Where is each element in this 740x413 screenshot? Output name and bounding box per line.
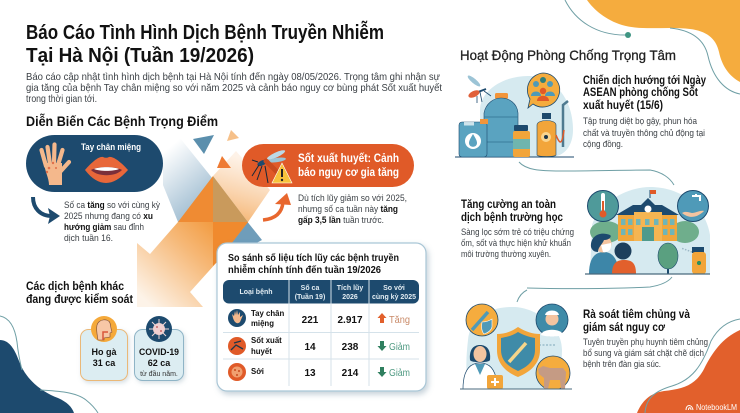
- panel: hand foot mouth pill: Tay chân miệng: [81, 142, 141, 152]
- text: school safety: môi trường thường xuyên.: [461, 249, 551, 260]
- text: hand foot mouth description: dịch tuần 16.: [64, 233, 113, 244]
- central decorative arrows: [137, 130, 270, 307]
- intro paragraph: trong thời gian tới.: [26, 93, 97, 105]
- text: hand foot mouth description: [64, 200, 160, 244]
- arrow: decreasing trend: [33, 197, 60, 224]
- text: vaccination review: bệnh trên đàn gia súc.: [583, 359, 661, 370]
- row: hand foot mouth: [228, 309, 410, 328]
- table header: cùng kỳ 2025: [372, 294, 416, 301]
- heading: other diseases: Các dịch bệnh khác: [26, 279, 124, 293]
- text: dengue description: gấp 3,5 lần tuần trước.: [298, 215, 384, 226]
- card: covid-19: COVID-19: [139, 347, 179, 357]
- table header: [223, 280, 419, 304]
- school building: [616, 190, 679, 241]
- row: hand foot mouth: 221: [302, 315, 319, 326]
- title: Báo Cáo Tình Hình Dịch Bệnh Truyền Nhiễm: [26, 20, 384, 44]
- table title: [228, 252, 399, 276]
- text: school safety: ốm, sốt và thực hiện khử khuẩn: [461, 238, 571, 249]
- text: hand foot mouth description: hướng giảm sau đỉnh: [64, 222, 144, 233]
- text: ASEAN dengue campaign: xuất huyết (15/6): [583, 100, 663, 112]
- mosquito: [466, 74, 491, 103]
- row: measles: Giảm: [389, 367, 410, 379]
- row: dengue: 14: [304, 342, 316, 353]
- intro paragraph: [26, 71, 442, 105]
- row: measles: Sởi: [251, 367, 264, 376]
- row: dengue: Giảm: [389, 341, 410, 353]
- row: measles: 13: [304, 368, 316, 379]
- text: vaccination review: Tuyên truyền phụ huynh tiêm chủng: [583, 337, 708, 348]
- row: hand foot mouth: 2.917: [337, 315, 363, 326]
- text: vaccination review: Rà soát tiêm chủng và: [583, 309, 691, 321]
- card: covid-19: từ đầu năm.: [140, 369, 178, 378]
- text: hand foot mouth description: Số ca tăng so với cùng kỳ: [64, 200, 160, 211]
- row: dengue: [228, 336, 410, 356]
- disinfectant sprayer: [681, 247, 706, 274]
- text: school safety: Sàng lọc sớm trẻ có triệu chứng: [461, 227, 574, 238]
- intro paragraph: Báo cáo cập nhật tình hình dịch bệnh tại Hà Nội tính đến ngày 08/05/2026. Trọng tâm ghi nhận sự: [26, 71, 440, 83]
- text: dengue description: [298, 193, 407, 226]
- row: hand foot mouth: Tay chân: [251, 309, 284, 318]
- heading: other diseases: đang được kiểm soát: [26, 292, 133, 306]
- vaccine circle: [466, 304, 498, 336]
- row: dengue: huyết: [251, 347, 272, 356]
- text: vaccination review: [583, 309, 708, 370]
- row: measles: 214: [342, 368, 359, 379]
- man with mask: [589, 234, 619, 274]
- table title: So sánh số liệu tích lũy các bệnh truyền: [228, 252, 399, 264]
- heading: key diseases: Diễn Biến Các Bệnh Trọng Điểm: [26, 113, 218, 129]
- text: school safety: dịch bệnh trường học: [461, 212, 564, 224]
- table header: Loại bệnh: [239, 289, 273, 296]
- thermometer circle: [588, 190, 618, 222]
- illustration: mosquito control: [455, 73, 574, 157]
- row: dengue: Sốt xuất: [251, 336, 282, 345]
- text: vaccination review: giám sát nguy cơ: [583, 322, 666, 334]
- heading: key activities: Hoạt Động Phòng Chống Trọng Tâm: [460, 47, 676, 63]
- text: vaccination review: bổ sung và giám sát chặt chẽ dịch: [583, 348, 704, 359]
- sprayer: [537, 101, 568, 156]
- card: covid-19: 62 ca: [148, 358, 171, 368]
- table header: (Tuần 19): [295, 292, 325, 301]
- illustration: school safety: [585, 187, 710, 274]
- speech bubble with people: [527, 73, 560, 108]
- tree: [658, 243, 678, 274]
- icon: lips: [85, 157, 128, 183]
- text: ASEAN dengue campaign: ASEAN phòng chống Sốt: [583, 87, 698, 99]
- card: pertussis: 31 ca: [93, 358, 116, 368]
- heading: other diseases: [26, 279, 133, 306]
- text: dengue description: nhưng số ca tuần này tăng: [298, 204, 398, 215]
- arrow: rising trend: [263, 193, 291, 220]
- table title: nhiễm chính tính đến tuần 19/2026: [228, 263, 381, 276]
- table header: So với: [383, 285, 405, 292]
- jerry can: [459, 119, 488, 157]
- panel: dengue pill: báo nguy cơ gia tăng: [298, 167, 399, 179]
- panel: dengue pill: Sốt xuất huyết: Cảnh: [298, 153, 399, 165]
- row: hand foot mouth: miệng: [251, 319, 274, 328]
- text: ASEAN dengue campaign: chất và truyền thông chủ động tại: [583, 128, 705, 139]
- row: dengue: 238: [342, 342, 359, 353]
- text: ASEAN dengue campaign: [583, 75, 706, 150]
- row: measles: [228, 363, 410, 381]
- table header: 2026: [342, 294, 358, 301]
- handwash circle: [678, 190, 708, 222]
- panel: comparison table: [217, 243, 426, 391]
- doctor: [463, 345, 503, 389]
- intro paragraph: gia tăng của bệnh Tay chân miệng so với năm 2025 và cảnh báo nguy cơ bùng phát Sốt xuất huyết: [26, 82, 442, 94]
- text: dengue description: Dù tích lũy giảm so với 2025,: [298, 193, 407, 204]
- title: Tại Hà Nội (Tuần 19/2026): [26, 45, 254, 67]
- icon: mosquito with warning: [252, 149, 292, 183]
- jar: [513, 125, 530, 157]
- woman: [612, 242, 636, 274]
- table header: Số ca: [301, 284, 319, 292]
- text: ASEAN dengue campaign: Chiến dịch hướng tới Ngày: [583, 75, 706, 87]
- card: pertussis: [80, 316, 128, 380]
- panel: dengue pill: [242, 144, 414, 187]
- illustration: vaccination: [460, 304, 572, 390]
- card: covid-19: [134, 316, 184, 380]
- cow circle: [536, 356, 570, 390]
- title: [26, 20, 384, 67]
- text: hand foot mouth description: 2025 nhưng đang có xu: [64, 211, 153, 222]
- row: hand foot mouth: Tăng: [389, 314, 410, 326]
- text: school safety: [461, 199, 574, 260]
- text: ASEAN dengue campaign: Tập trung diệt bọ gậy, phun hóa: [583, 116, 698, 127]
- icon: hand: [42, 144, 69, 185]
- text: ASEAN dengue campaign: cộng đồng.: [583, 139, 623, 150]
- text: school safety: Tăng cường an toàn: [461, 199, 556, 211]
- nurse circle: [536, 304, 568, 336]
- water bottle: [484, 93, 518, 157]
- shield: [497, 327, 540, 377]
- table header: Tích lũy: [337, 285, 363, 292]
- panel: hand foot mouth pill: [26, 135, 163, 192]
- card: pertussis: Ho gà: [91, 347, 117, 357]
